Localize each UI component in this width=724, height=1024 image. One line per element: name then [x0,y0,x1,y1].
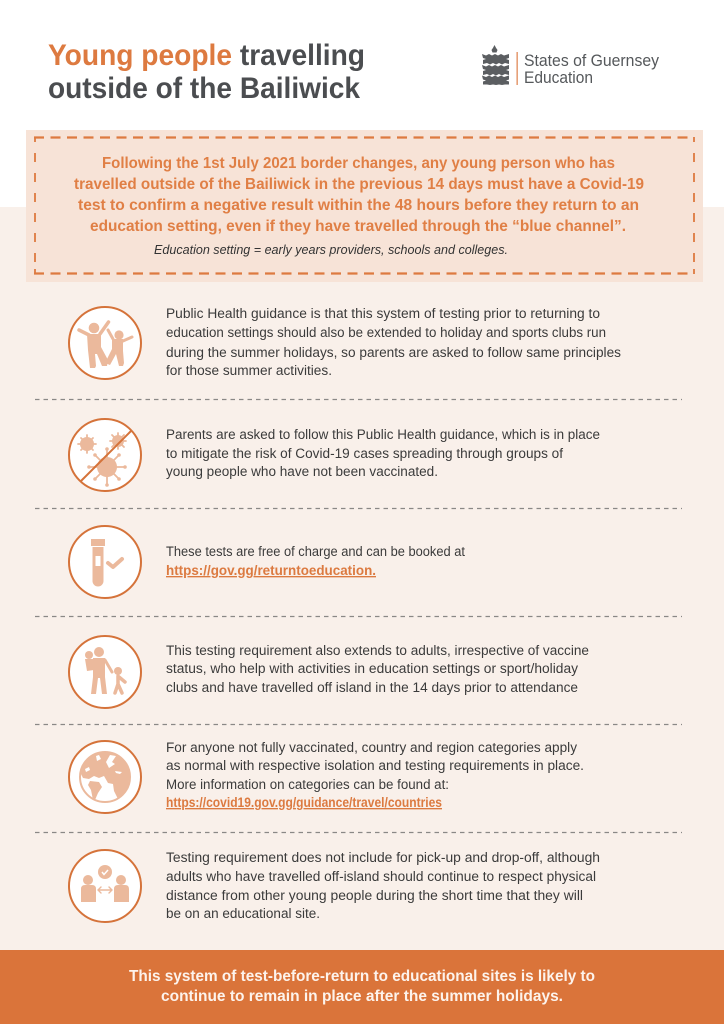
callout text: education setting, even if they have travelled through the “blue channel”. [90,218,626,235]
callout text: travelled outside of the Bailiwick in the previous 14 days must have a Covid-19 [74,176,644,193]
text: free tests [166,544,465,578]
text: not fully vaccinated: More information on categories can be found at: [166,777,449,792]
footer banner [0,950,724,1024]
text: mitigate the risk: Parents are asked to follow this Public Health guidance, which is in place [166,427,600,442]
text: holiday and sports clubs: during the summer holidays, so parents are asked to follow same principles [166,345,621,360]
title [48,39,365,105]
callout text: test to confirm a negative result within the 48 hours before they return to an [78,197,639,214]
text: not fully vaccinated: as normal with respective isolation and testing requirements in place. [166,758,584,773]
text: adults requirement [166,643,589,695]
text: not fully vaccinated: For anyone not fully vaccinated, country and region categories apply [166,740,577,755]
icon: physical distancing [69,850,141,922]
panel: border changes callout [26,130,703,282]
text: mitigate the risk: young people who have not been vaccinated. [166,464,438,479]
logo: States of Guernsey Education: States of Guernsey [524,51,659,70]
callout text: Following the 1st July 2021 border changes, any young person who has [102,155,615,172]
text: holiday and sports clubs [166,306,621,378]
footer banner: continue to remain in place after the summer holidays. [161,988,563,1005]
text: pick-up and drop-off: adults who have travelled off-island should continue to respect physical [166,869,596,884]
logo: States of Guernsey Education [482,45,659,87]
icon: crossed-out virus [69,419,141,491]
text: mitigate the risk [166,427,600,479]
icon: test tube with tick [69,526,141,598]
text: adults requirement: status, who help with activities in education settings or sport/holiday [166,661,578,676]
text: pick-up and drop-off [166,850,600,921]
text: pick-up and drop-off: distance from other young people during the short time that they will [166,888,583,903]
icon: children playing [69,307,141,379]
text: not fully vaccinated: https://covid19.gov.gg/guidance/travel/countries [166,795,442,810]
icon: globe [69,741,141,813]
text: free tests: These tests are free of charge and can be booked at [166,544,465,559]
text: not fully vaccinated [166,740,584,810]
logo: States of Guernsey Education: Education [524,68,593,87]
definition note: Education setting = early years providers, schools and colleges. [154,242,508,257]
callout text [74,155,644,235]
title: Young people travelling [48,39,365,72]
text: mitigate the risk: to mitigate the risk of Covid-19 cases spreading through groups of [166,446,563,461]
text: holiday and sports clubs: for those summer activities. [166,363,332,378]
text: pick-up and drop-off: be on an educational site. [166,906,320,921]
icon: adult with children [69,636,141,708]
text: adults requirement: clubs and have travelled off island in the 14 days prior to attendance [166,680,578,695]
text: holiday and sports clubs: Public Health guidance is that this system of testing prior to returning to [166,306,600,321]
footer banner: This system of test-before-return to educational sites is likely to [129,968,595,985]
text: holiday and sports clubs: education settings should also be extended to holiday and sports clubs run [166,325,606,340]
title: outside of the Bailiwick [48,72,360,105]
text: adults requirement: This testing requirement also extends to adults, irrespective of vaccine [166,643,589,658]
text: free tests: https://gov.gg/returntoeducation. [166,563,376,578]
icon: Guernsey crest [482,45,509,85]
text: pick-up and drop-off: Testing requirement does not include for pick-up and drop-off, although [166,850,600,865]
